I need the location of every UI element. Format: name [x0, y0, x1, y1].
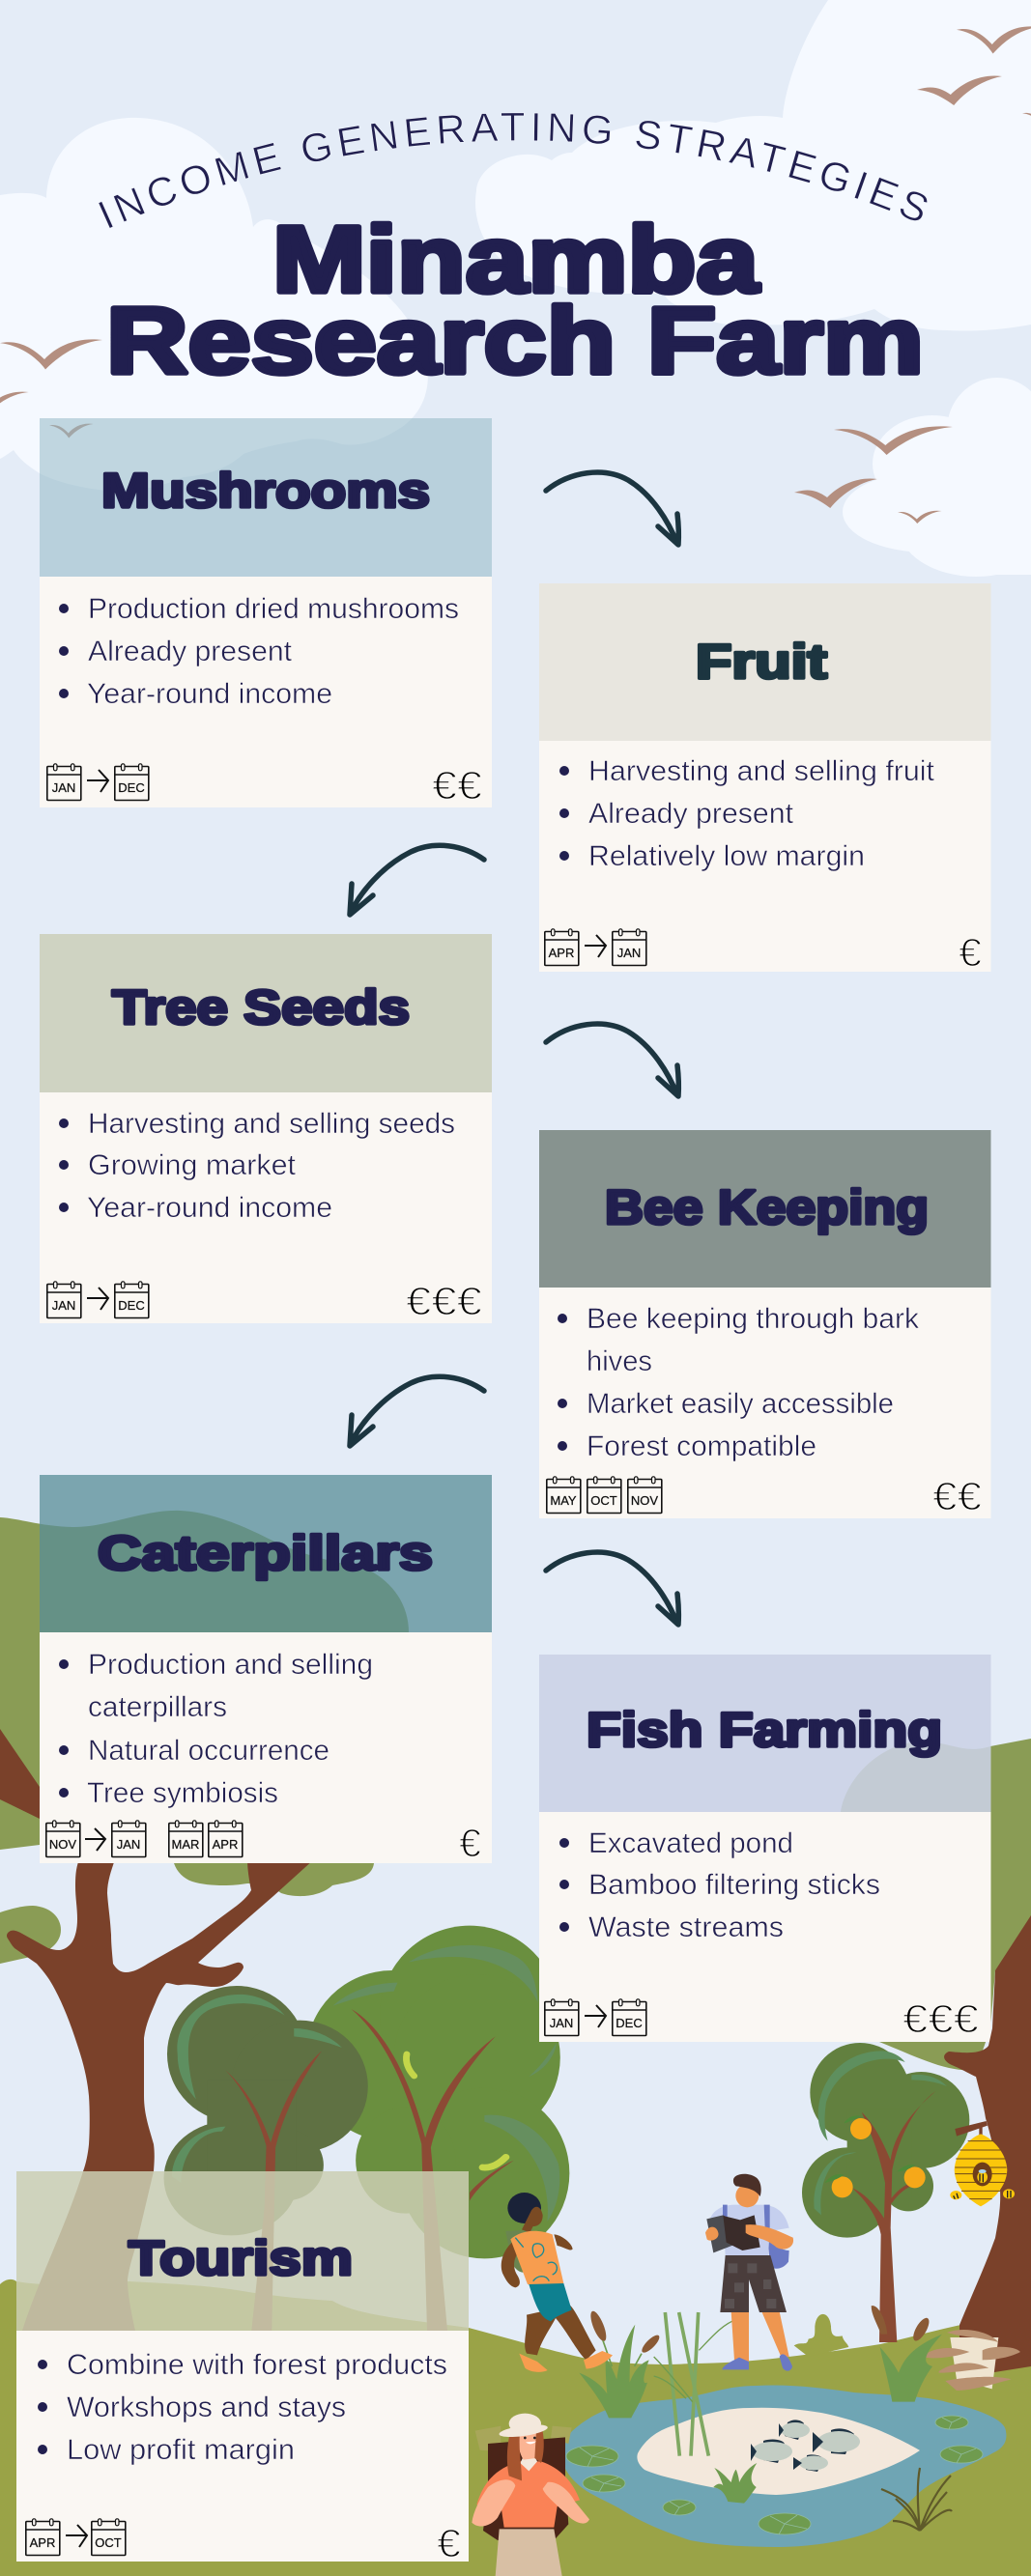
- calendar: nov to jan, mar apr: JAN: [117, 1837, 140, 1852]
- bullets: hives: [587, 1345, 652, 1377]
- bullets: Harvesting and selling seeds: [88, 1108, 455, 1140]
- tree: bright green with caterpillars: [306, 1926, 569, 2331]
- profit rating: €€: [932, 1474, 982, 1518]
- lily pads: [566, 2416, 983, 2534]
- calendar: apr to jan: [545, 929, 646, 966]
- bullets: Low profit margin: [67, 2434, 295, 2466]
- big tree: right trunk: [944, 1915, 1031, 2373]
- sand island: [637, 2408, 920, 2495]
- cloud: top right: [475, 0, 1031, 331]
- heading: Fruit: [696, 635, 827, 689]
- profit rating: €: [459, 1821, 481, 1865]
- trunk and branches: [225, 2051, 322, 2331]
- bullets: Already present: [88, 636, 293, 667]
- curved subtitle: INCOME GENERATING STRATEGIES: [99, 112, 928, 228]
- calendar: may oct nov: OCT: [590, 1493, 617, 1508]
- profit rating: €: [959, 930, 982, 975]
- bullets: [559, 1827, 880, 1943]
- heading: Mushrooms: [101, 464, 430, 518]
- tree: dark green: [164, 1986, 368, 2331]
- calendar: may oct nov: MAY: [550, 1493, 577, 1508]
- bullets: Market easily accessible: [587, 1388, 894, 1420]
- caterpillar on lower branch: [482, 2157, 506, 2167]
- calendar: jan to dec: [47, 764, 149, 800]
- bullets: [59, 593, 459, 710]
- bullets: Production and selling: [88, 1649, 373, 1681]
- arrow 5: [546, 1552, 678, 1625]
- bullets: [59, 1649, 373, 1809]
- calendar: jan to dec: DEC: [616, 2016, 643, 2030]
- calendar: jan to dec: DEC: [118, 780, 145, 795]
- bullets: Combine with forest products: [67, 2349, 447, 2381]
- branches: [352, 2009, 496, 2331]
- reeds and plant right: [794, 2306, 942, 2402]
- bullets: Production dried mushrooms: [88, 593, 459, 625]
- panel: fruit: [539, 583, 991, 975]
- cloud: right small: [843, 378, 1031, 577]
- heading: Tree Seeds: [112, 980, 410, 1034]
- calendar: nov to jan, mar apr: APR: [213, 1837, 238, 1852]
- bullets: Already present: [588, 798, 794, 830]
- fish: [751, 2420, 860, 2472]
- bullets: [558, 1303, 920, 1462]
- calendar: jan to dec: [545, 1999, 646, 2036]
- foliage: right hill: [841, 1739, 1031, 2070]
- hill: left foliage: [0, 1511, 409, 1896]
- calendar: apr to oct: [26, 2519, 126, 2556]
- heading: Bee Keeping: [605, 1180, 929, 1234]
- grass tuft: [881, 2468, 952, 2531]
- bullets: Harvesting and selling fruit: [588, 755, 935, 787]
- arrow 3: [546, 1024, 678, 1096]
- person: walking hiker: [501, 2193, 613, 2372]
- calendar: jan to dec: JAN: [52, 1298, 75, 1313]
- calendar: jan to dec: JAN: [52, 780, 75, 795]
- birds: [0, 26, 1031, 524]
- calendar: nov to jan, mar apr: NOV: [49, 1837, 76, 1852]
- foliage: left lobe: [0, 1906, 61, 1964]
- calendar: nov to jan, mar apr: [46, 1821, 243, 1856]
- panel: bee keeping: [539, 1130, 991, 1518]
- caterpillar on branch: [406, 2054, 415, 2076]
- bullets: Waste streams: [588, 1911, 784, 1943]
- bullets: Tree symbiosis: [87, 1777, 278, 1809]
- main title: Minamba: [272, 207, 759, 312]
- calendar: nov to jan, mar apr: MAR: [172, 1837, 199, 1852]
- calendar: apr to oct: OCT: [95, 2535, 122, 2550]
- profit rating: €€: [432, 763, 482, 807]
- arrow 2: [350, 845, 484, 915]
- heading: Caterpillars: [98, 1526, 433, 1580]
- profit rating: €: [437, 2521, 461, 2565]
- heading: Tourism: [129, 2231, 353, 2285]
- person: reader with map: [705, 2174, 793, 2371]
- arrow 1: [546, 472, 678, 545]
- cloud: left: [0, 118, 428, 491]
- profit rating: €€€: [406, 1279, 482, 1323]
- bullets: [559, 755, 935, 872]
- big tree: left branch stub: [0, 1729, 40, 1819]
- ground: [0, 2279, 1031, 2576]
- highlights: [172, 1995, 342, 2183]
- pond plants and bamboo: [579, 2309, 757, 2504]
- bullets: Workshops and stays: [67, 2392, 346, 2423]
- heading: Fish Farming: [587, 1703, 942, 1757]
- orange tree: [802, 2043, 969, 2342]
- big tree: trunk and branches: [7, 1859, 314, 2331]
- main title: [106, 207, 924, 393]
- bullets: caterpillars: [88, 1691, 227, 1723]
- panel: fish farming: [539, 1655, 991, 2042]
- bullets: Growing market: [88, 1149, 297, 1181]
- profit rating: €€€: [902, 1996, 979, 2041]
- calendar: apr to jan: JAN: [617, 946, 641, 960]
- bullets: [59, 1108, 455, 1224]
- bullets: Year-round income: [87, 1192, 332, 1224]
- person: woman with backpack: [472, 2414, 589, 2576]
- bullets: Excavated pond: [588, 1827, 793, 1859]
- calendar: jan to dec: JAN: [550, 2016, 573, 2030]
- arrow 4: [350, 1376, 484, 1446]
- panel: mushrooms: [40, 418, 492, 807]
- bullets: Year-round income: [87, 678, 332, 710]
- calendar: jan to dec: [47, 1282, 149, 1317]
- main title: Research Farm: [106, 288, 924, 393]
- bullets: Relatively low margin: [588, 840, 865, 872]
- calendar: may oct nov: NOV: [631, 1493, 658, 1508]
- oyster mushrooms: [921, 2330, 1020, 2391]
- bullets: Bamboo filtering sticks: [588, 1869, 880, 1901]
- calendar: apr to oct: APR: [30, 2535, 55, 2550]
- bullets: Natural occurrence: [88, 1735, 329, 1767]
- bullets: [38, 2349, 447, 2466]
- panel: tourism: [16, 2171, 469, 2565]
- calendar: apr to jan: APR: [549, 946, 574, 960]
- calendar: jan to dec: DEC: [118, 1298, 145, 1313]
- calendar: may oct nov: [547, 1477, 662, 1513]
- beehive: [950, 2121, 1015, 2206]
- bullets: Bee keeping through bark: [587, 1303, 920, 1335]
- pond: [562, 2385, 1006, 2547]
- panel: caterpillars: [40, 1475, 492, 1865]
- bullets: Forest compatible: [587, 1430, 816, 1462]
- panel: tree seeds: [40, 934, 492, 1323]
